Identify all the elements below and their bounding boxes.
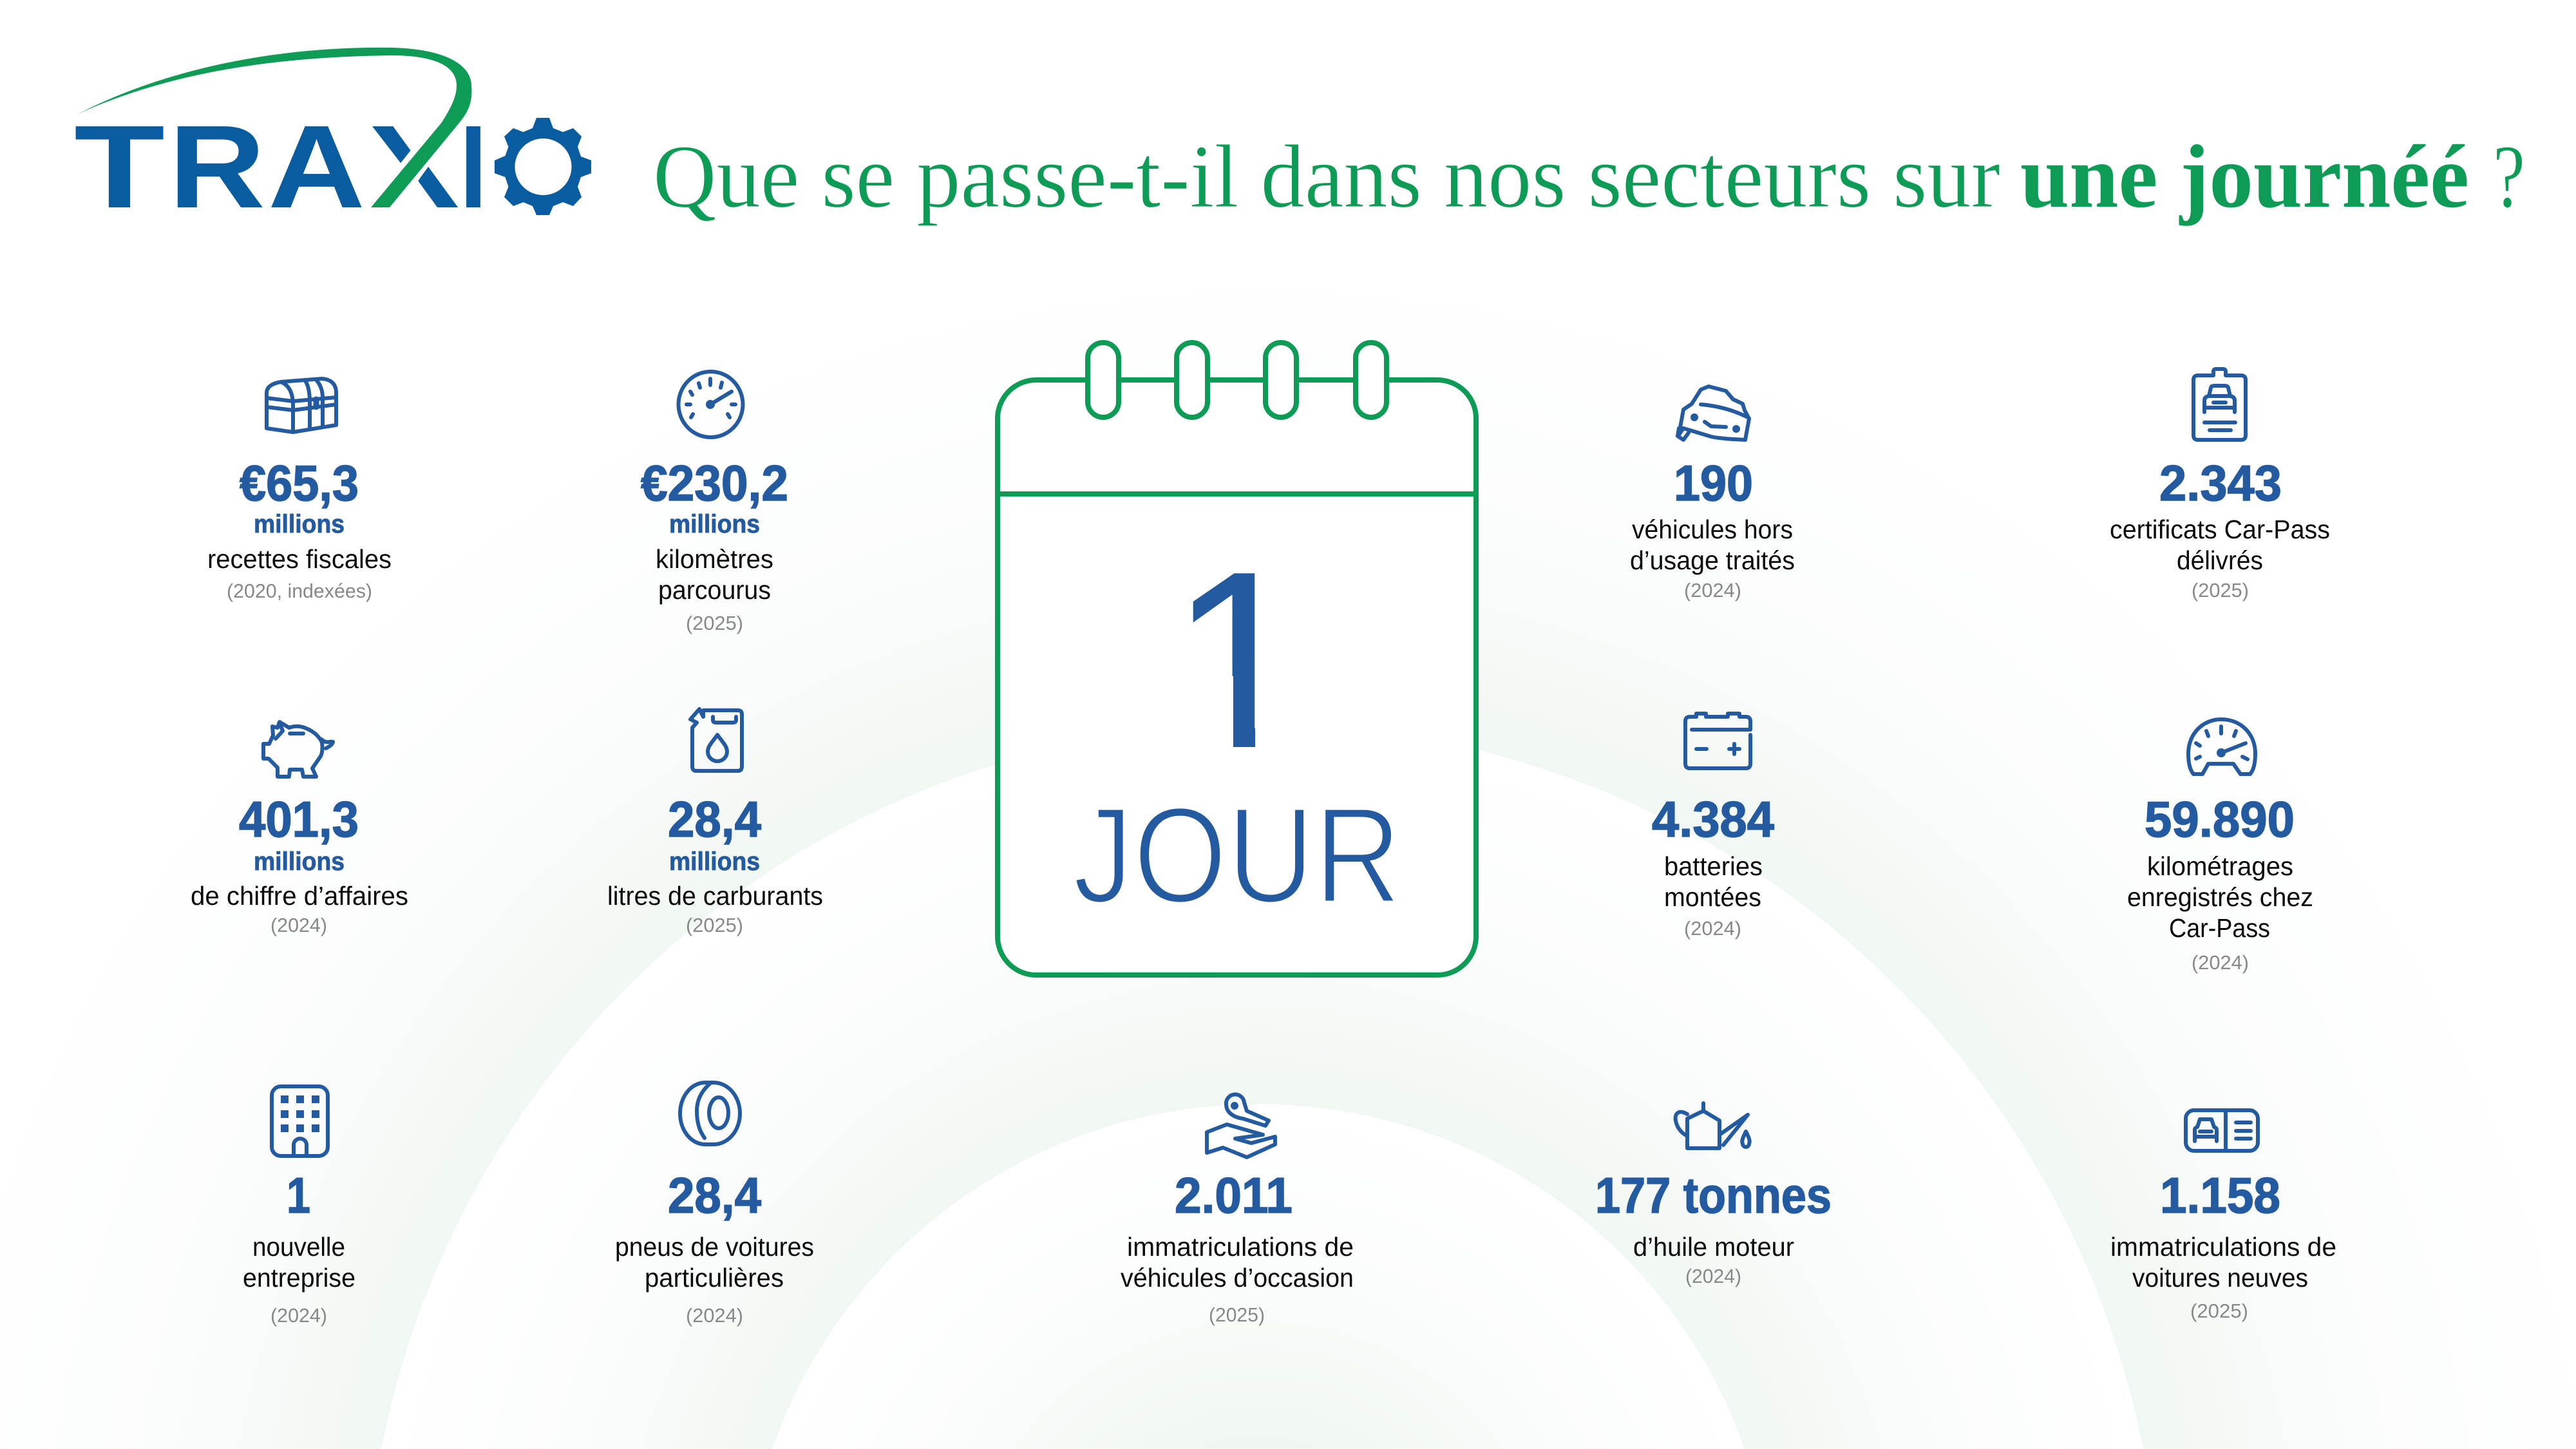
year: (2024) (2192, 951, 2249, 974)
stat: litres de carburants (607, 709, 823, 936)
stat: huile moteur (1595, 1103, 1832, 1287)
stat: certificats Car-Pass: délivrés (2177, 545, 2263, 575)
year: (2024) (270, 1304, 327, 1327)
value: 190 (1674, 455, 1753, 511)
stat: batteries montées (1652, 714, 1774, 940)
value: 2.011 (1175, 1167, 1293, 1224)
unit: millions (669, 848, 760, 876)
icon: oil can (1676, 1103, 1750, 1148)
icon: wrecked car (1678, 386, 1749, 440)
icon: registration book (2186, 1110, 2258, 1151)
stat: certificats Car-Pass (2110, 369, 2330, 601)
stat: batteries montées: montées (1664, 882, 1761, 912)
label: nouvelle (252, 1232, 345, 1262)
year: (2024) (270, 914, 327, 936)
year: (2020, indexées) (227, 580, 372, 602)
stat: nouvelle entreprise (243, 1086, 355, 1327)
label: certificats Car-Pass (2110, 515, 2330, 544)
stat: kilométrages Car-Pass (2127, 719, 2313, 974)
year: (2025) (2192, 579, 2249, 601)
label: batteries (1664, 851, 1763, 881)
icon: car-pass clipboard (2193, 369, 2246, 440)
calendar: 1 JOUR (998, 343, 1476, 975)
stat: kilomètres parcourus (641, 372, 788, 634)
logo: TRAXIO: A (268, 100, 365, 232)
year: (2024) (1684, 579, 1741, 601)
unit: millions (254, 510, 345, 538)
stat: kilométrages Car-Pass: enregistrés chez (2127, 882, 2313, 912)
year: (2024) (686, 1304, 743, 1327)
stat: pneus: particulières (645, 1263, 784, 1293)
label: de chiffre d’affaires (191, 881, 408, 911)
title: ? (2493, 127, 2525, 227)
logo: TRAXIO: T (74, 100, 165, 232)
stat: véhicules d'occasion: véhicules d’occasion (1121, 1263, 1354, 1293)
icon: key in hand (1207, 1094, 1275, 1157)
value: 1 (287, 1167, 310, 1224)
value: 1.158 (2160, 1167, 2280, 1224)
icon: piggy bank (263, 722, 333, 777)
value: 28,4 (668, 791, 761, 848)
stat: nouvelle entreprise: entreprise (243, 1263, 355, 1293)
value: €65,3 (240, 455, 359, 511)
year: (2025) (686, 914, 743, 936)
year: (2024) (1685, 1265, 1741, 1287)
value: €230,2 (641, 455, 788, 511)
stat: véhicules hors d'usage (1630, 386, 1795, 601)
label: pneus de voitures (615, 1232, 814, 1262)
year: (2025) (686, 612, 743, 634)
stat: véhicules d'occasion (1121, 1094, 1354, 1326)
stat: voitures neuves (2110, 1110, 2336, 1322)
logo: TRAXIO (74, 48, 591, 232)
year: (2025) (2190, 1300, 2248, 1322)
value: 2.343 (2159, 455, 2282, 511)
stat: kilomètres parcourus: parcourus (658, 575, 771, 605)
stat: pneus (615, 1083, 814, 1327)
logo: TRAXIO: I (460, 100, 487, 232)
icon: speedometer (2188, 719, 2255, 774)
label: kilométrages (2147, 851, 2293, 881)
icon: jerrycan (690, 709, 742, 771)
label: d’huile moteur (1633, 1232, 1794, 1262)
label: immatriculations de (1127, 1232, 1354, 1262)
label: litres de carburants (607, 881, 823, 911)
unit: millions (254, 848, 345, 876)
title: Que se passe-t-il dans nos secteurs sur (653, 127, 2000, 227)
icon: treasure chest (267, 379, 336, 432)
logo: TRAXIO: X (368, 100, 459, 232)
value: 177 tonnes (1595, 1167, 1832, 1224)
value: 4.384 (1652, 791, 1774, 848)
icon: gauge (679, 372, 743, 437)
icon: building (272, 1086, 328, 1156)
unit: millions (669, 510, 760, 538)
value: 28,4 (668, 1167, 761, 1224)
label: véhicules hors (1632, 515, 1793, 544)
calendar number: 1 (1169, 519, 1309, 801)
logo: TRAXIO: R (169, 100, 265, 232)
title: une journéé (2020, 127, 2469, 227)
icon: battery (1685, 714, 1750, 768)
icon: tire (680, 1083, 740, 1144)
year: (2025) (1209, 1303, 1265, 1326)
year: (2024) (1684, 917, 1741, 940)
label: immatriculations de (2110, 1232, 2336, 1262)
value: 59.890 (2145, 791, 2295, 848)
stat: voitures neuves: voitures neuves (2132, 1263, 2308, 1293)
stat: véhicules hors d'usage: d’usage traités (1630, 545, 1795, 575)
label: kilomètres (656, 544, 773, 574)
stat: kilométrages Car-Pass: Car-Pass (2169, 913, 2270, 943)
stat: recettes fiscales (207, 379, 392, 602)
stat: chiffre d'affaires (191, 722, 408, 936)
calendar unit: JOUR (1073, 779, 1401, 931)
value: 401,3 (239, 791, 359, 848)
label: recettes fiscales (207, 544, 392, 574)
